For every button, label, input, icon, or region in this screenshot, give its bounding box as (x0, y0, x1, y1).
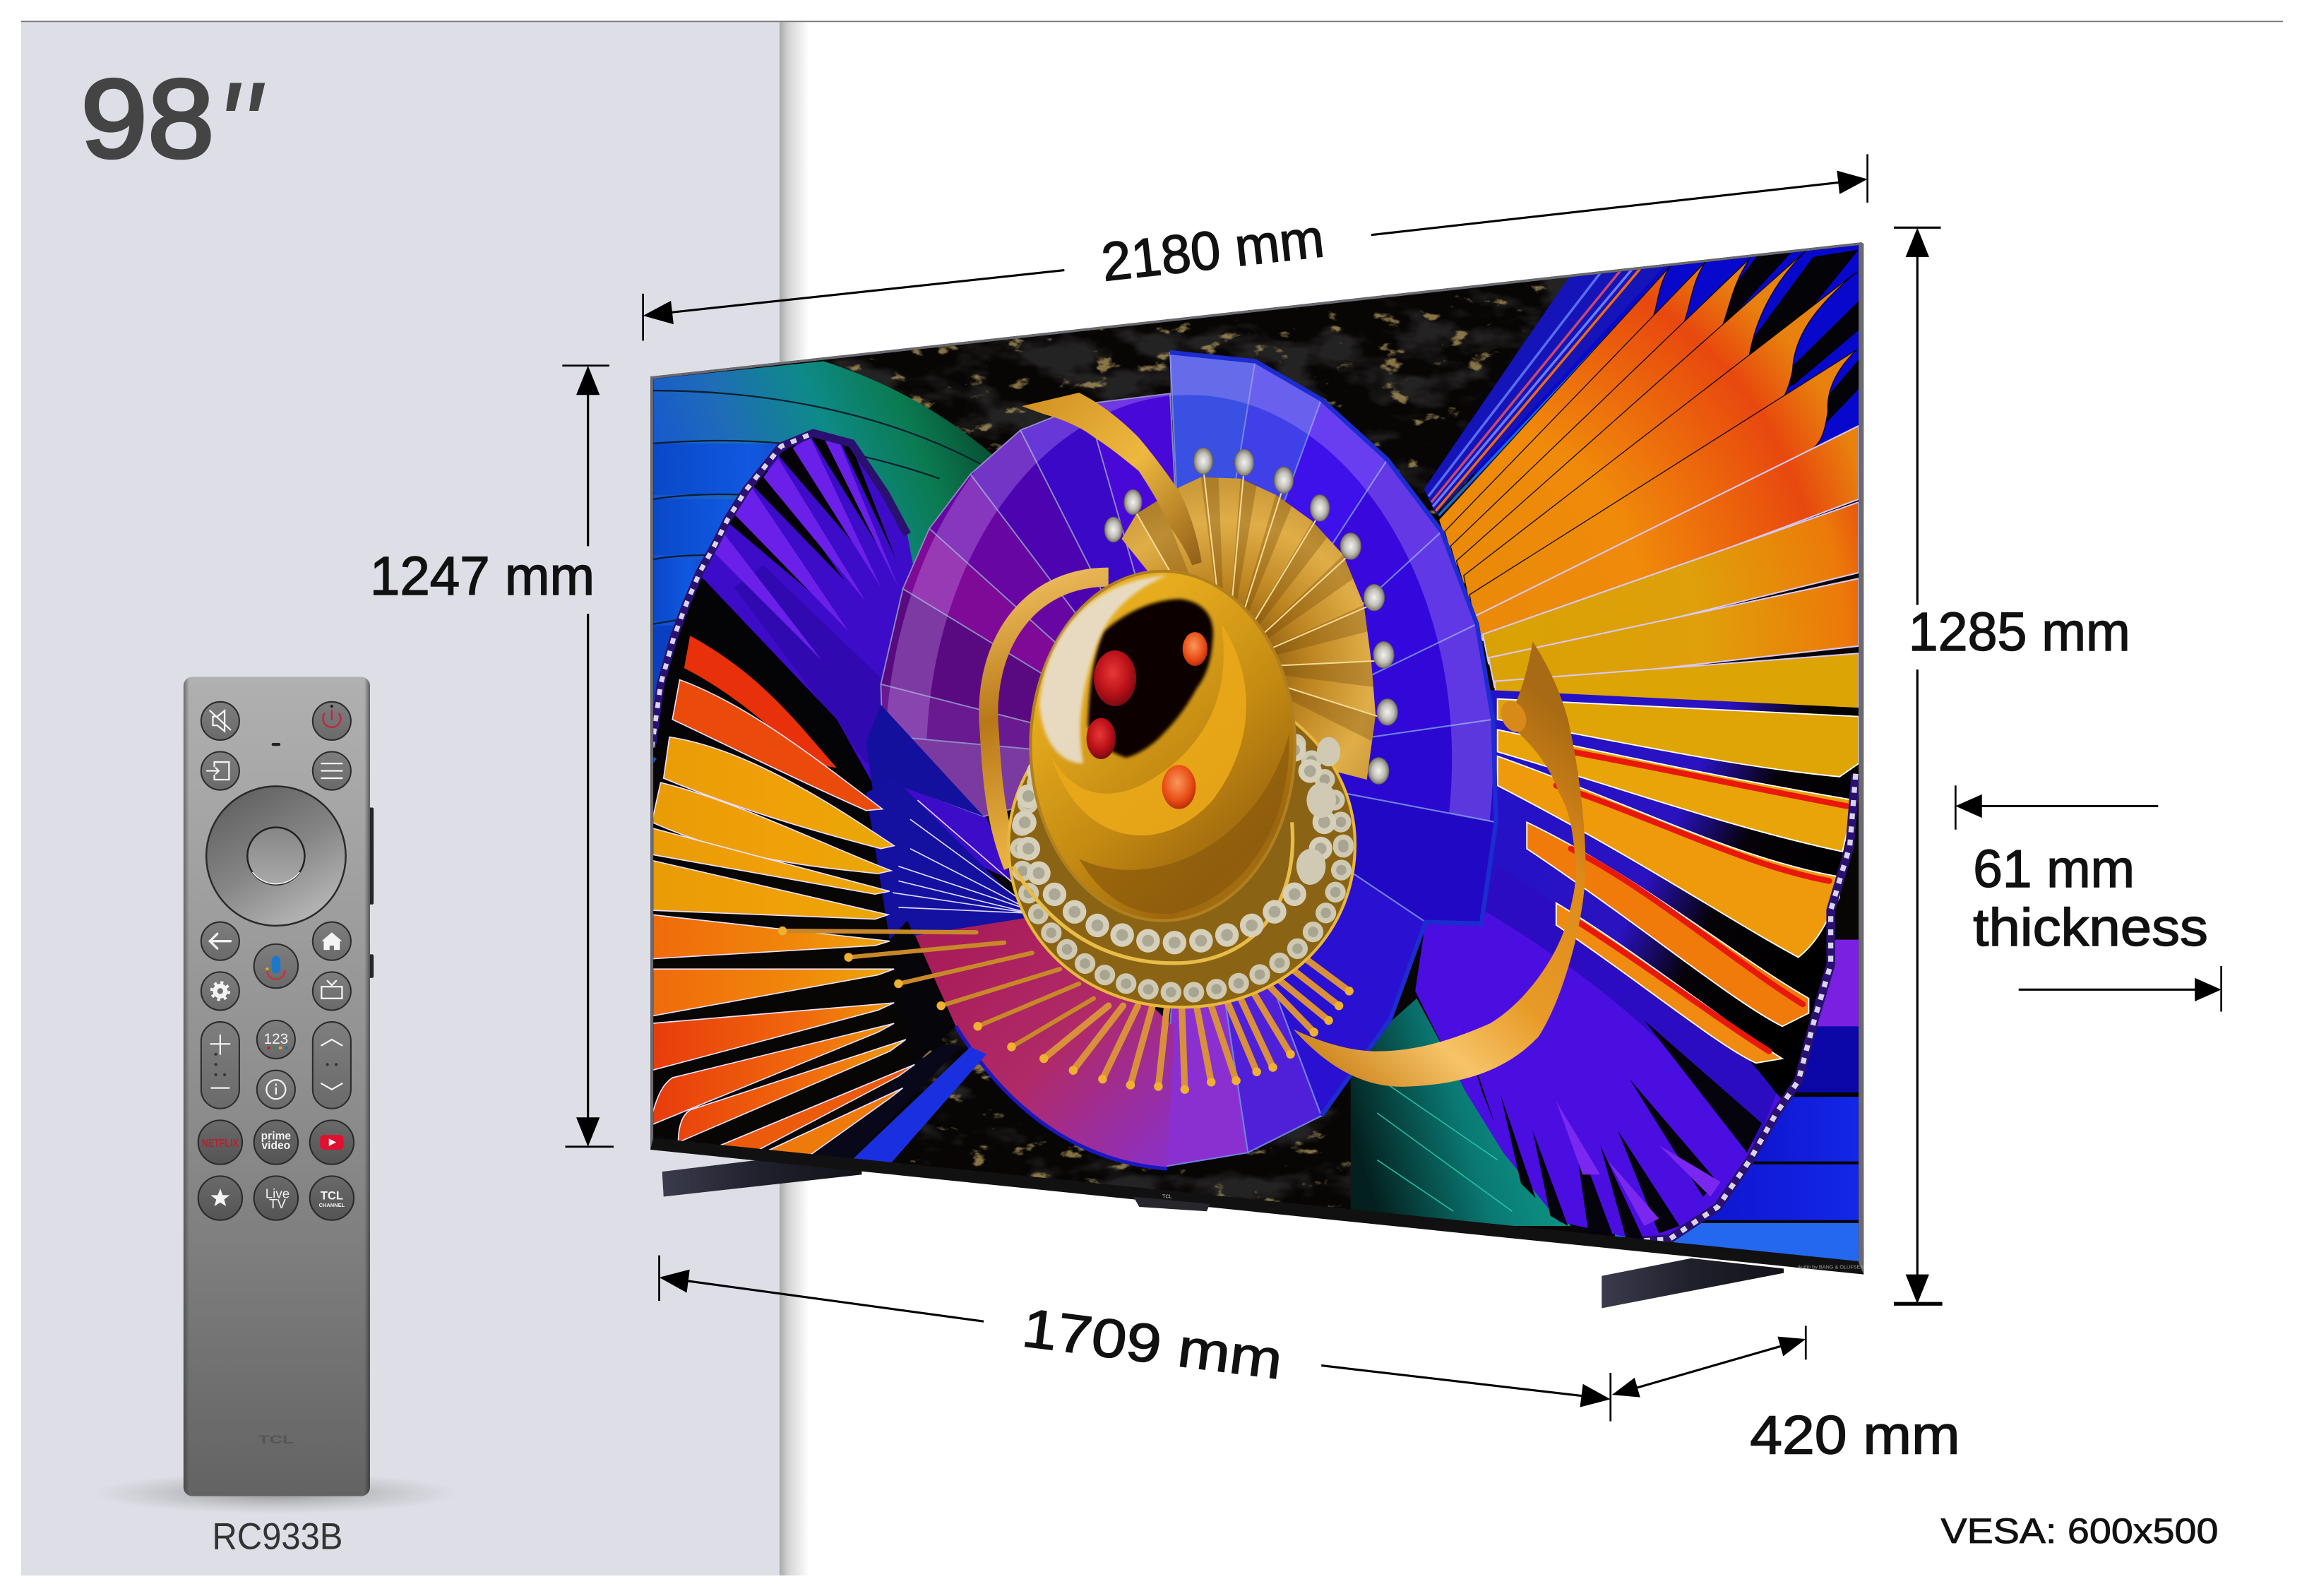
dimension: width 2180 mm (643, 154, 1868, 340)
remote: app buttons: NETFLIX (202, 1138, 239, 1150)
tv frame (650, 242, 1863, 1275)
dimension: total height 1285 mm (1894, 227, 2130, 1304)
remote: voice button (266, 956, 285, 979)
dimension: depth 420 mm (1612, 1326, 1960, 1465)
left beaded edge (652, 433, 907, 747)
gold rods: thick lower (1044, 958, 1349, 1090)
lower-right feather fan (1415, 690, 1859, 1241)
left gold ring (989, 577, 1109, 867)
remote side buttons (369, 808, 374, 978)
red droplets (1087, 632, 1207, 809)
dimension: total height 1285 mm: 1285 mm (1909, 602, 2130, 662)
remote: app buttons: prime (261, 1130, 291, 1142)
disc lower crimson segment (907, 913, 1174, 1169)
sphere glass highlight (1039, 576, 1167, 763)
dimension: thickness 61 mm: 61 mm (1973, 839, 2135, 898)
disc outer light band (906, 374, 1472, 1144)
remote: app buttons: CHANNEL (319, 1202, 345, 1208)
tv centre sensor: TCL (1162, 1193, 1172, 1200)
rock texture (822, 264, 1645, 1219)
left blue rays (866, 705, 1031, 940)
panel: grey sidebar (21, 21, 809, 1576)
remote: top buttons (201, 702, 351, 1109)
gold pleated fan (1121, 472, 1383, 780)
disc left segments (881, 393, 1189, 816)
text: remote model: RC933B (212, 1515, 342, 1557)
text: brand audio mark: Audio by BANG & OLUFSEN (1798, 1263, 1864, 1270)
remote: app buttons: TV (269, 1196, 286, 1211)
remote: navigation ring (206, 786, 346, 926)
gold rod tips (778, 927, 1354, 1094)
top gold ribbon (1022, 393, 1202, 565)
dimension: stand width 1709 mm: 1709 mm (1019, 1297, 1286, 1391)
dimension: thickness 61 mm: thickness (1973, 898, 2208, 957)
dimension: thickness 61 mm (1955, 785, 2222, 1012)
heading: screen size 98 inch: " (215, 54, 266, 199)
glass sphere (1029, 570, 1296, 922)
remote: app buttons: video (262, 1140, 290, 1152)
remote control: TCL (258, 1433, 294, 1446)
purple disc (881, 352, 1496, 1169)
right beaded edge (1642, 774, 1856, 1241)
top-right blue back rays (1468, 220, 1859, 484)
left black wedge (890, 921, 955, 1066)
dimension: screen height 1247 mm (370, 366, 614, 1147)
left feather fan (652, 433, 1013, 881)
black feather wedge (653, 578, 873, 815)
dimension: screen height 1247 mm: 1247 mm (370, 546, 595, 607)
heading: screen size 98 inch (80, 54, 266, 199)
tv screen artwork (646, 220, 1864, 1278)
sphere gold swirl (1051, 624, 1246, 835)
heading: screen size 98 inch: 98 (80, 56, 215, 181)
diamonds (1104, 448, 1397, 784)
remote: labelled buttons: 123 (264, 1031, 288, 1047)
panel shadow edge (780, 22, 809, 1576)
text: VESA specification: VESA: 600x500 (1941, 1511, 2218, 1551)
top-left teal fan (653, 361, 1013, 763)
remote control (93, 677, 460, 1514)
sphere dark interior (1088, 599, 1213, 758)
right gold ribbon (1294, 642, 1585, 1087)
dimension: width 2180 mm: 2180 mm (1099, 208, 1327, 293)
remote: home and settings (212, 932, 342, 999)
tv centre sensor (1133, 1193, 1210, 1211)
tv stands (662, 1160, 1784, 1308)
lower teal fan (1351, 999, 1571, 1226)
remote: app buttons: Live (266, 1186, 290, 1201)
red edges on yellow bands (1556, 749, 1847, 1052)
left orange fan (652, 636, 914, 1157)
remote: button icons (207, 705, 342, 1099)
remote: rocker dots (215, 1053, 338, 1076)
right yellow rays (1474, 426, 1859, 713)
diamond ring (1008, 683, 1355, 1007)
remote body (184, 677, 370, 1496)
top-right orange fan (1439, 249, 1857, 629)
remote: app buttons (198, 1120, 354, 1220)
thin blue rays (1424, 264, 1666, 516)
lower-right yellow bands (1498, 699, 1859, 1063)
remote: app buttons: TCL (321, 1189, 343, 1203)
disc right segments (1159, 352, 1496, 1167)
gold rods: thin left (782, 931, 1094, 1047)
dimension: stand width 1709 mm (660, 1256, 1611, 1422)
lower-right blue bands (1615, 940, 1864, 1270)
dimension: depth 420 mm: 420 mm (1750, 1405, 1960, 1465)
